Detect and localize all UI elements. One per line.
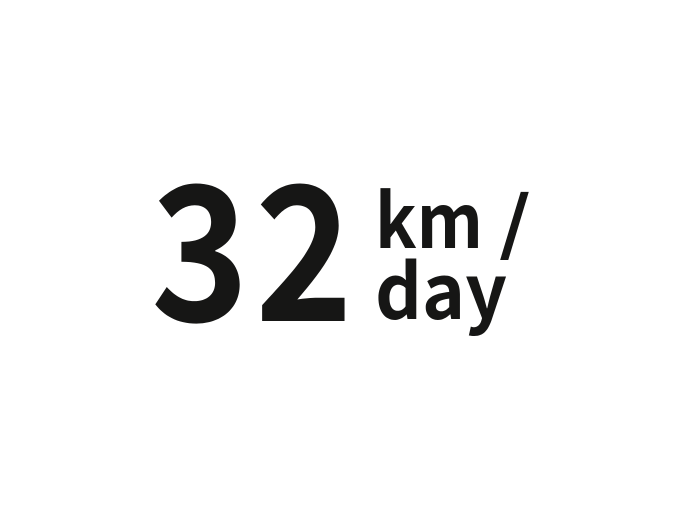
unit line 1: km /: km <box>375 161 483 270</box>
large number: 32: 3 <box>151 104 249 375</box>
unit line 2: day: day <box>375 231 507 341</box>
unit line 1: km /: / <box>499 168 531 268</box>
large number: 32: 2 <box>255 104 353 375</box>
large number: 32 <box>151 104 353 375</box>
